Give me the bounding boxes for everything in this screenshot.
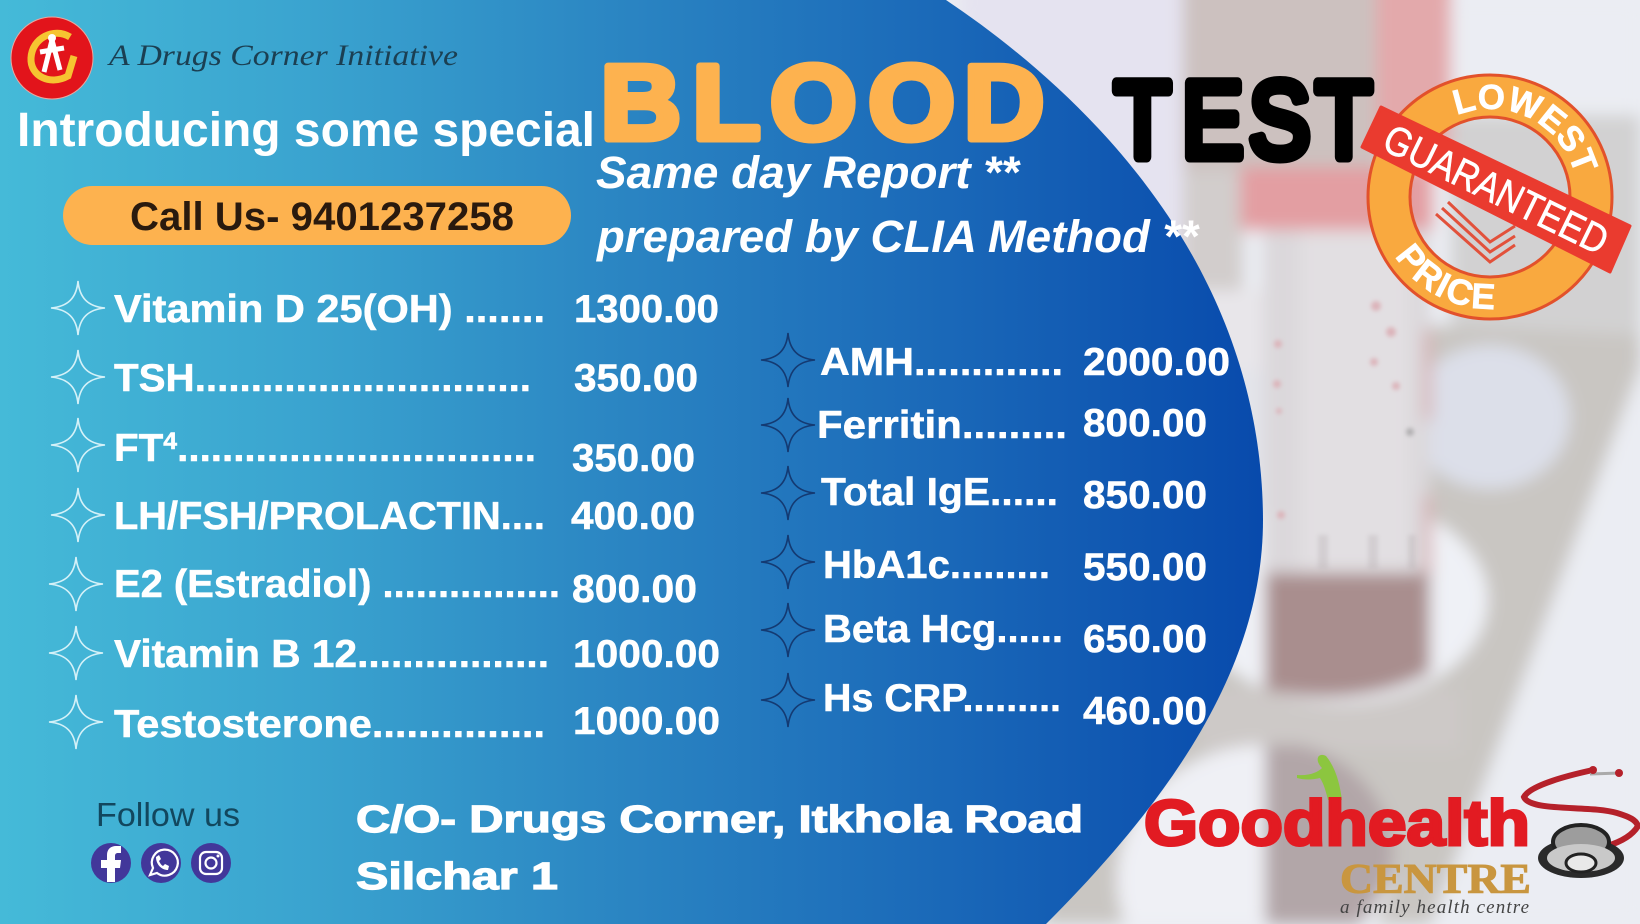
address: Silchar 1	[356, 856, 558, 898]
row: HbA1c	[761, 535, 1207, 589]
background photo: blood tube in rack	[900, 0, 1640, 924]
row: E2: E2 (Estradiol) ................	[114, 563, 560, 606]
row: HbA1c: HbA1c.........	[823, 544, 1050, 587]
title: TEST: TEST	[1114, 60, 1372, 181]
icon: green figure	[1297, 755, 1342, 800]
icon: whatsapp	[141, 843, 181, 883]
logo: Goodhealth Centre: a family health centre	[1340, 897, 1529, 918]
row: FT4: FT	[114, 427, 162, 470]
row: Ferritin: 800.00	[1083, 402, 1207, 445]
logo: Drugs Corner emblem	[11, 17, 93, 99]
call button	[63, 186, 571, 245]
subtitle: Same day Report: Same day Report **	[596, 147, 1022, 198]
row: LH/FSH/Prolactin	[51, 488, 695, 542]
icon: stethoscope	[1524, 766, 1638, 878]
row: Ferritin: Ferritin.........	[817, 404, 1067, 447]
row: E2	[49, 557, 697, 611]
row: Vitamin D: Vitamin D 25(OH) .......	[114, 288, 545, 331]
row: Testosterone: 1000.00	[573, 700, 720, 743]
row: TSH: 350.00	[574, 357, 698, 400]
address: C/O- Drugs Corner, Itkhola Road	[356, 799, 1083, 841]
row: E2: 800.00	[572, 568, 697, 611]
row: Hs CRP	[761, 673, 1207, 733]
row: Hs CRP: Hs CRP.........	[823, 677, 1061, 720]
row: AMH: AMH.............	[820, 341, 1063, 384]
subtitle: CLIA method: prepared by CLIA Method **	[596, 211, 1201, 262]
rack plate	[1040, 325, 1640, 924]
logo: Goodhealth Centre: CENTRE	[1340, 857, 1531, 903]
row: Vitamin B 12: 1000.00	[573, 633, 720, 676]
row: Vitamin B 12: Vitamin B 12.................	[114, 633, 549, 676]
price badge: lowest price guaranteed	[1360, 74, 1632, 320]
row: TSH: TSH..............................	[114, 357, 531, 400]
price badge: lowest price guaranteed: PRICE	[1396, 242, 1494, 310]
follow us label: Follow us	[96, 796, 240, 833]
right price list	[761, 333, 1230, 733]
row: Beta Hcg	[761, 603, 1207, 661]
row: Total IgE: 850.00	[1083, 474, 1207, 517]
row: FT4	[51, 418, 695, 480]
logo: Goodhealth Centre: Goodhealth	[1144, 787, 1530, 859]
icon: facebook	[91, 843, 131, 883]
row: FT4: 4	[163, 428, 178, 455]
row: Total IgE: Total IgE......	[821, 471, 1058, 514]
row: LH/FSH/Prolactin: 400.00	[571, 495, 695, 538]
logo: Goodhealth Centre	[1144, 755, 1638, 918]
call button: Call Us- 9401237258	[130, 195, 514, 239]
row: Beta Hcg: Beta Hcg......	[823, 608, 1063, 651]
heading: Introducing some special: Introducing some special	[17, 104, 595, 157]
row: Testosterone: Testosterone...............	[114, 703, 545, 746]
row: Beta Hcg: 650.00	[1083, 618, 1207, 661]
row: Vitamin D	[51, 281, 719, 335]
clear tube	[1263, 230, 1430, 575]
row: Ferritin	[761, 398, 1207, 452]
icon: instagram	[191, 843, 231, 883]
row: Total IgE	[761, 466, 1207, 520]
row: Vitamin B 12	[49, 626, 720, 680]
row: LH/FSH/Prolactin: LH/FSH/PROLACTIN....	[114, 495, 545, 538]
price badge: lowest price guaranteed: LOWEST	[1452, 84, 1598, 168]
row: TSH	[51, 350, 698, 404]
row: FT4: 350.00	[572, 437, 695, 480]
row: AMH	[761, 333, 1230, 387]
row: AMH: 2000.00	[1083, 341, 1230, 384]
row: Testosterone	[49, 695, 720, 749]
address	[356, 799, 1083, 898]
tagline: A Drugs Corner Initiative: A Drugs Corner Initiative	[107, 39, 458, 72]
title: BLOOD: BLOOD	[601, 44, 1044, 162]
blue curved panel	[0, 0, 1263, 924]
row: Vitamin D: 1300.00	[574, 288, 719, 331]
row: HbA1c: 550.00	[1083, 546, 1207, 589]
row: Hs CRP: 460.00	[1083, 690, 1207, 733]
blood level	[1265, 573, 1430, 697]
row: FT4: ................................	[177, 427, 536, 470]
left price list	[49, 281, 720, 749]
cap	[1240, 167, 1433, 230]
